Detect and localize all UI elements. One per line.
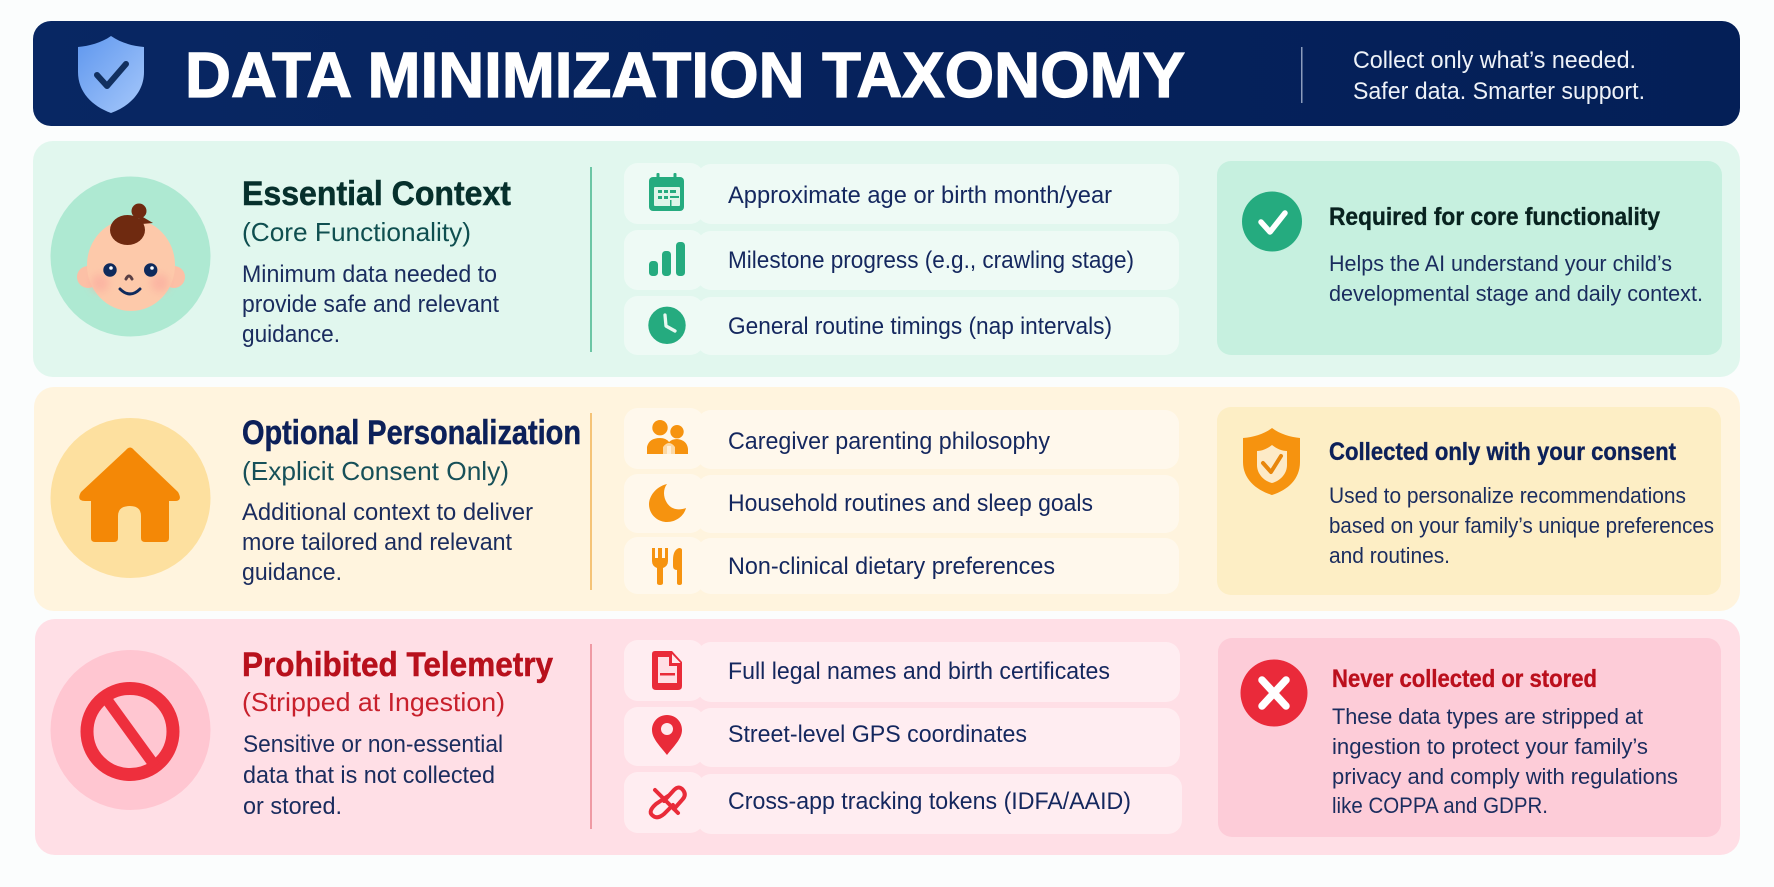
panel: optional personalization xyxy=(34,387,1740,611)
card: never collected or stored xyxy=(1218,638,1721,837)
icon: caregivers xyxy=(647,420,688,454)
card body: Helps the AI understand your child’s xyxy=(1329,251,1672,276)
card body: like COPPA and GDPR. xyxy=(1332,793,1548,818)
card body: based on your family’s unique preferences xyxy=(1329,513,1714,538)
item text: General routine timings (nap intervals) xyxy=(728,313,1112,340)
icon: fork and knife xyxy=(652,548,682,585)
icon: house xyxy=(50,418,210,578)
tagline: Safer data. Smarter support. xyxy=(1353,78,1645,105)
item text: Household routines and sleep goals xyxy=(728,490,1093,517)
description: more tailored and relevant xyxy=(242,529,512,556)
card: collected only with consent xyxy=(1217,407,1721,595)
icon: document xyxy=(652,651,682,690)
icon: x circle xyxy=(1240,660,1308,726)
item text: Approximate age or birth month/year xyxy=(728,182,1112,209)
description xyxy=(242,499,533,586)
card body xyxy=(1329,251,1703,306)
card body: ingestion to protect your family’s xyxy=(1332,734,1648,759)
icon: bars xyxy=(649,242,685,276)
subheading: (Explicit Consent Only) xyxy=(242,456,509,486)
list: essential data items xyxy=(624,163,1179,355)
subheading: (Core Functionality) xyxy=(242,217,471,247)
card body: Used to personalize recommendations xyxy=(1329,483,1686,508)
card body: These data types are stripped at xyxy=(1332,704,1643,729)
item text: Milestone progress (e.g., crawling stage) xyxy=(728,247,1134,274)
panel: essential context xyxy=(33,141,1740,377)
tagline: Collect only what’s needed. xyxy=(1353,47,1636,74)
heading: essential context: Essential Context xyxy=(242,175,511,213)
icon: orange shield xyxy=(1243,428,1300,495)
heading: optional personalization: Optional Personalization xyxy=(242,414,581,452)
icon: baby face xyxy=(50,176,210,336)
card heading: Required for core functionality xyxy=(1329,203,1660,231)
card body xyxy=(1329,483,1714,568)
description: or stored. xyxy=(243,793,342,820)
icon: shield with check xyxy=(78,36,144,113)
list: optional data items xyxy=(624,408,1179,594)
icon: moon xyxy=(649,484,686,522)
icon: clock xyxy=(648,307,686,344)
title: DATA MINIMIZATION TAXONOMY xyxy=(185,39,1185,111)
subheading: (Stripped at Ingestion) xyxy=(242,687,505,717)
tagline xyxy=(1353,47,1645,105)
item text: Full legal names and birth certificates xyxy=(728,658,1110,685)
description xyxy=(242,261,499,348)
description: Additional context to deliver xyxy=(242,499,533,526)
description: Sensitive or non-essential xyxy=(243,731,503,758)
header banner xyxy=(33,21,1740,126)
description: guidance. xyxy=(242,321,340,348)
icon: broken link xyxy=(651,788,685,817)
item text: Street-level GPS coordinates xyxy=(728,721,1027,748)
item text: Caregiver parenting philosophy xyxy=(728,428,1050,455)
description: guidance. xyxy=(242,559,342,586)
card heading: Never collected or stored xyxy=(1332,665,1597,693)
icon: map pin xyxy=(652,715,682,755)
icon: calendar xyxy=(649,173,684,211)
description: data that is not collected xyxy=(243,762,495,789)
card body: developmental stage and daily context. xyxy=(1329,281,1703,306)
item text: Cross-app tracking tokens (IDFA/AAID) xyxy=(728,788,1131,815)
list: prohibited data items xyxy=(624,640,1182,834)
item text: Non-clinical dietary preferences xyxy=(728,553,1055,580)
card heading: Collected only with your consent xyxy=(1329,438,1677,466)
icon: prohibited sign xyxy=(50,650,210,810)
card body xyxy=(1332,704,1678,818)
card: required for core functionality xyxy=(1217,161,1722,355)
heading: prohibited telemetry: Prohibited Telemetry xyxy=(242,646,553,684)
panel: prohibited telemetry xyxy=(35,619,1740,855)
icon: check circle xyxy=(1242,192,1302,252)
card body: and routines. xyxy=(1329,543,1450,568)
description xyxy=(243,731,503,820)
description: Minimum data needed to xyxy=(242,261,497,288)
description: provide safe and relevant xyxy=(242,291,499,318)
card body: privacy and comply with regulations xyxy=(1332,764,1678,789)
